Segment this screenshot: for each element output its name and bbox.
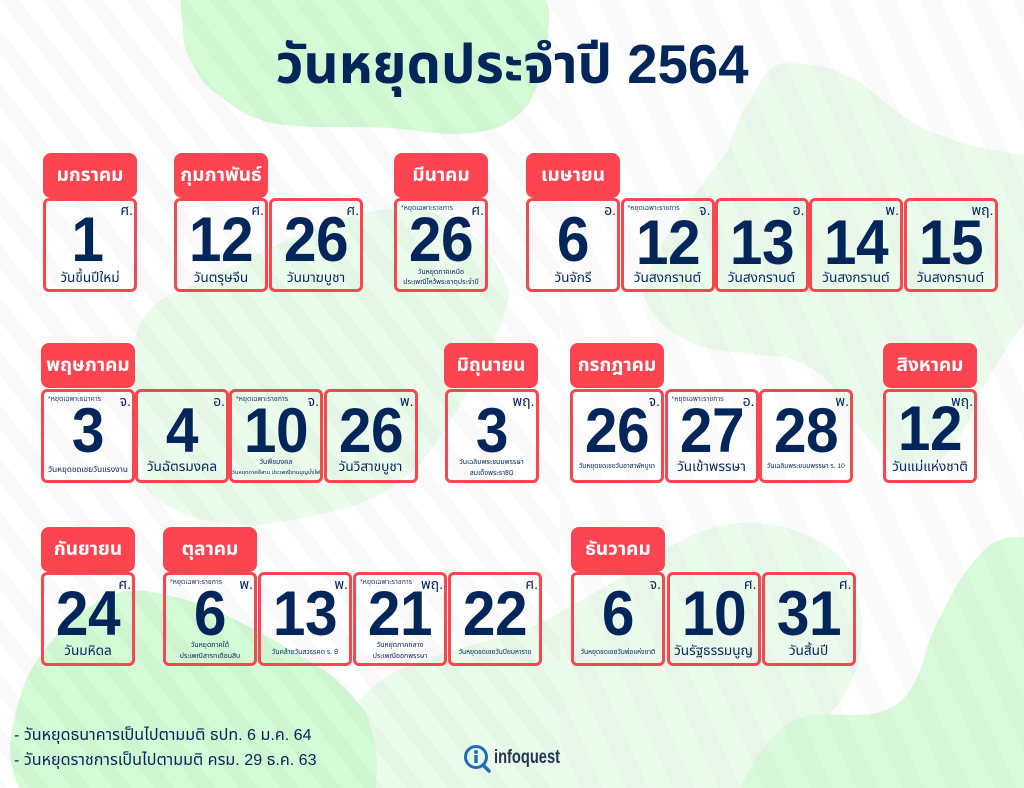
- month label: กรกฎาคม: กรกฎาคม: [578, 355, 656, 376]
- card: 12 กุมภาพันธ์: ศ.: [251, 202, 264, 218]
- card: 21 ตุลาคม: 21: [368, 579, 432, 649]
- card: 31 ธันวาคม: 31: [776, 579, 841, 649]
- card: 26 กุมภาพันธ์: ศ.: [346, 202, 359, 218]
- card: 26 พฤษภาคม: วันวิสาขบูชา: [339, 459, 402, 474]
- card: 10 ธันวาคม: [666, 572, 760, 666]
- card: 13 เมษายน: วันสงกรานต์: [728, 270, 795, 285]
- month label: มีนาคม: [394, 153, 488, 198]
- card: 28 กรกฎาคม: วันเฉลิมพระชนมพรรษา ร. 10: [767, 463, 845, 470]
- card: 6 ธันวาคม: [571, 572, 665, 666]
- month label: กุมภาพันธ์: กุมภาพันธ์: [180, 165, 262, 186]
- card: 28 กรกฎาคม: 28: [774, 396, 838, 466]
- card: 12 กุมภาพันธ์: [174, 198, 268, 292]
- card: 6 ตุลาคม: [163, 572, 257, 666]
- card: 12 สิงหาคม: วันแม่แห่งชาติ: [892, 459, 968, 474]
- card: 21 ตุลาคม: ประเพณีออกพรรษา: [373, 653, 427, 660]
- card: 31 ธันวาคม: วันสิ้นปี: [789, 643, 828, 658]
- card: 6 ตุลาคม: *หยุดเฉพาะราชการ: [170, 579, 222, 586]
- card: 10 พฤษภาคม: วันหยุดภาคอีสาน ประเพณีงานบุญบั้งไฟ: [232, 470, 320, 476]
- card: 13 เมษายน: [714, 198, 808, 292]
- card: 26 พฤษภาคม: พ.: [400, 393, 414, 409]
- month label: ธันวาคม: [571, 527, 665, 572]
- card: 26 กรกฎาคม: 26: [585, 396, 649, 466]
- card: 13 เมษายน: 13: [729, 208, 794, 278]
- month label: กุมภาพันธ์: [174, 153, 268, 198]
- month label: เมษายน: เมษายน: [541, 165, 605, 186]
- card: 6 ตุลาคม: ประเพณีสารทเดือนสิบ: [180, 653, 240, 660]
- card: 6 ตุลาคม: 6: [194, 579, 226, 649]
- card: 3 พฤษภาคม: [41, 389, 135, 483]
- card: 13 ตุลาคม: 13: [273, 579, 337, 649]
- card: 6 ธันวาคม: 6: [602, 579, 634, 649]
- card: 10 ธันวาคม: วันรัฐธรรมนูญ: [674, 643, 753, 658]
- card: 4 พฤษภาคม: [135, 389, 229, 483]
- icon: magnifier with i: [466, 746, 489, 771]
- logo: infoquest: [464, 745, 561, 773]
- card: 10 พฤษภาคม: *หยุดเฉพาะราชการ: [236, 396, 288, 403]
- card: 21 ตุลาคม: พฤ.: [421, 576, 443, 592]
- card: 10 พฤษภาคม: 10: [244, 396, 308, 466]
- card: 6 ตุลาคม: พ.: [239, 576, 253, 592]
- card: 4 พฤษภาคม: อ.: [213, 393, 225, 409]
- card: 22 ตุลาคม: วันหยุดชดเชยวันปิยมหาราช: [459, 649, 531, 656]
- card: 6 เมษายน: [526, 198, 620, 292]
- card: 6 ธันวาคม: จ.: [650, 576, 661, 592]
- card: 13 ตุลาคม: พ.: [334, 576, 348, 592]
- card: 26 กุมภาพันธ์: วันมาฆบูชา: [287, 270, 345, 285]
- card: 21 ตุลาคม: [353, 572, 447, 666]
- month label: กรกฎาคม: [570, 343, 664, 388]
- card: 27 กรกฎาคม: 27: [679, 396, 744, 466]
- card: 31 ธันวาคม: ศ.: [839, 576, 852, 592]
- card: 27 กรกฎาคม: [664, 389, 758, 483]
- card: 22 ตุลาคม: 22: [463, 579, 527, 649]
- card: 6 ธันวาคม: วันหยุดชดเชยวันพ่อแห่งชาติ: [581, 649, 655, 656]
- month label: สิงหาคม: สิงหาคม: [897, 355, 963, 376]
- card: 26 กุมภาพันธ์: [269, 198, 363, 292]
- card: 26 มีนาคม: วันหยุดภาคเหนือ: [418, 269, 464, 276]
- card: 14 เมษายน: พ.: [885, 202, 899, 218]
- card: 15 เมษายน: 15: [918, 208, 983, 278]
- card: 3 มิถุนายน: [444, 389, 538, 483]
- card: 27 กรกฎาคม: *หยุดเฉพาะราชการ: [672, 396, 724, 403]
- card: 27 กรกฎาคม: วันเข้าพรรษา: [677, 459, 746, 474]
- card: 6 เมษายน: อ.: [604, 202, 616, 218]
- card: 26 มีนาคม: ศ.: [471, 202, 484, 218]
- card: 12 เมษายน: [620, 198, 714, 292]
- month label: ตุลาคม: [163, 527, 257, 572]
- card: 24 กันยายน: [41, 572, 135, 666]
- month label: มิถุนายน: มิถุนายน: [457, 355, 525, 376]
- card: 1 มกราคม: วันขึ้นปีใหม่: [60, 270, 120, 285]
- card: 15 เมษายน: [904, 198, 998, 292]
- month label: กันยายน: กันยายน: [54, 539, 122, 560]
- month label: พฤษภาคม: [41, 343, 135, 388]
- card: 12 เมษายน: *หยุดเฉพาะราชการ: [628, 205, 680, 212]
- month label: สิงหาคม: [883, 343, 977, 388]
- card: 27 กรกฎาคม: อ.: [743, 393, 754, 409]
- card: 15 เมษายน: พฤ.: [971, 202, 994, 218]
- footnotes: - วันหยุดธนาคารเป็นไปตามมติ ธปท. 6 ม.ค. 64: [14, 726, 312, 744]
- card: 12 เมษายน: จ.: [699, 202, 710, 218]
- card: 21 ตุลาคม: วันหยุดภาคกลาง: [377, 642, 423, 649]
- card: 31 ธันวาคม: [762, 572, 856, 666]
- card: 26 กุมภาพันธ์: 26: [284, 205, 348, 275]
- month label: กันยายน: [41, 527, 135, 572]
- card: 14 เมษายน: [809, 198, 903, 292]
- card: 26 มีนาคม: ประเพณีไหว้พระธาตุประจำปี: [403, 279, 479, 286]
- card: 26 มีนาคม: *หยุดเฉพาะราชการ: [401, 205, 453, 212]
- card: 21 ตุลาคม: *หยุดเฉพาะราชการ: [360, 579, 412, 586]
- card: 14 เมษายน: 14: [824, 208, 888, 278]
- card: 10 พฤษภาคม: วันพืชมงคล: [260, 459, 292, 466]
- card: 24 กันยายน: 24: [56, 579, 120, 649]
- month label: มกราคม: [43, 153, 137, 198]
- card: 12 สิงหาคม: [883, 389, 977, 483]
- card: 13 ตุลาคม: [258, 572, 352, 666]
- card: 3 พฤษภาคม: จ.: [120, 393, 131, 409]
- card: 13 ตุลาคม: วันคล้ายวันสวรรคต ร. 9: [272, 649, 338, 656]
- card: 12 กุมภาพันธ์: 12: [189, 205, 253, 275]
- card: 26 มีนาคม: [394, 198, 488, 292]
- title: วันหยุดประจำปี 2564: [275, 34, 749, 95]
- footnotes: - วันหยุดราชการเป็นไปตามมติ ครม. 29 ธ.ค. 63: [14, 751, 317, 769]
- card: 28 กรกฎาคม: พ.: [835, 393, 849, 409]
- card: 10 พฤษภาคม: [229, 389, 323, 483]
- card: 10 พฤษภาคม: จ.: [308, 393, 319, 409]
- card: 10 ธันวาคม: 10: [681, 579, 746, 649]
- card: 1 มกราคม: ศ.: [120, 202, 133, 218]
- card: 3 มิถุนายน: วันเฉลิมพระชนมพรรษา: [459, 458, 524, 466]
- month label: เมษายน: [526, 153, 620, 198]
- card: 3 มิถุนายน: พฤ.: [512, 393, 534, 409]
- month label: มกราคม: มกราคม: [57, 165, 123, 186]
- card: 1 มกราคม: 1: [71, 205, 104, 275]
- card: 4 พฤษภาคม: 4: [166, 396, 198, 466]
- card: 24 กันยายน: วันมหิดล: [64, 643, 112, 658]
- card: 3 มิถุนายน: 3: [475, 396, 508, 466]
- card: 22 ตุลาคม: [448, 572, 542, 666]
- card: 26 มีนาคม: 26: [409, 205, 473, 275]
- card: 10 ธันวาคม: ศ.: [744, 576, 756, 592]
- card: 3 มิถุนายน: สมเด็จพระราชินี: [470, 470, 513, 476]
- card: 12 กุมภาพันธ์: วันตรุษจีน: [194, 270, 248, 285]
- card: 14 เมษายน: วันสงกรานต์: [822, 270, 890, 285]
- month label: มิถุนายน: [444, 343, 538, 388]
- card: 12 เมษายน: 12: [635, 208, 700, 278]
- card: 1 มกราคม: [43, 198, 137, 292]
- month label: ตุลาคม: ตุลาคม: [182, 539, 238, 560]
- month label: มีนาคม: มีนาคม: [412, 165, 470, 186]
- card: 3 พฤษภาคม: 3: [72, 396, 104, 466]
- month label: ธันวาคม: ธันวาคม: [585, 539, 651, 560]
- card: 3 พฤษภาคม: วันหยุดชดเชยวันแรงงาน: [48, 465, 128, 474]
- card: 15 เมษายน: วันสงกรานต์: [917, 270, 984, 285]
- card: 6 เมษายน: 6: [557, 205, 589, 275]
- card: 6 เมษายน: วันจักรี: [554, 270, 592, 285]
- card: 6 ตุลาคม: วันหยุดภาคใต้: [191, 642, 229, 649]
- card: 12 สิงหาคม: 12: [898, 394, 962, 464]
- card: 26 พฤษภาคม: [324, 389, 418, 483]
- card: 4 พฤษภาคม: วันฉัตรมงคล: [147, 459, 217, 474]
- card: 26 กรกฎาคม: จ.: [649, 393, 660, 409]
- card: 26 พฤษภาคม: 26: [338, 396, 403, 466]
- footnotes: [14, 726, 317, 769]
- card: 12 เมษายน: วันสงกรานต์: [634, 270, 701, 285]
- month label: พฤษภาคม: พฤษภาคม: [46, 355, 130, 376]
- card: 24 กันยายน: ศ.: [118, 576, 131, 592]
- card: 12 สิงหาคม: พฤ.: [951, 393, 973, 409]
- card: 26 กรกฎาคม: [570, 389, 664, 483]
- card: 28 กรกฎาคม: [759, 389, 853, 483]
- card: 26 กรกฎาคม: วันหยุดชดเชยวันอาสาฬหบูชา: [579, 463, 655, 470]
- card: 3 พฤษภาคม: *หยุดเฉพาะธนาคาร: [48, 396, 101, 403]
- card: 13 เมษายน: อ.: [793, 202, 804, 218]
- card: 22 ตุลาคม: ศ.: [525, 576, 538, 592]
